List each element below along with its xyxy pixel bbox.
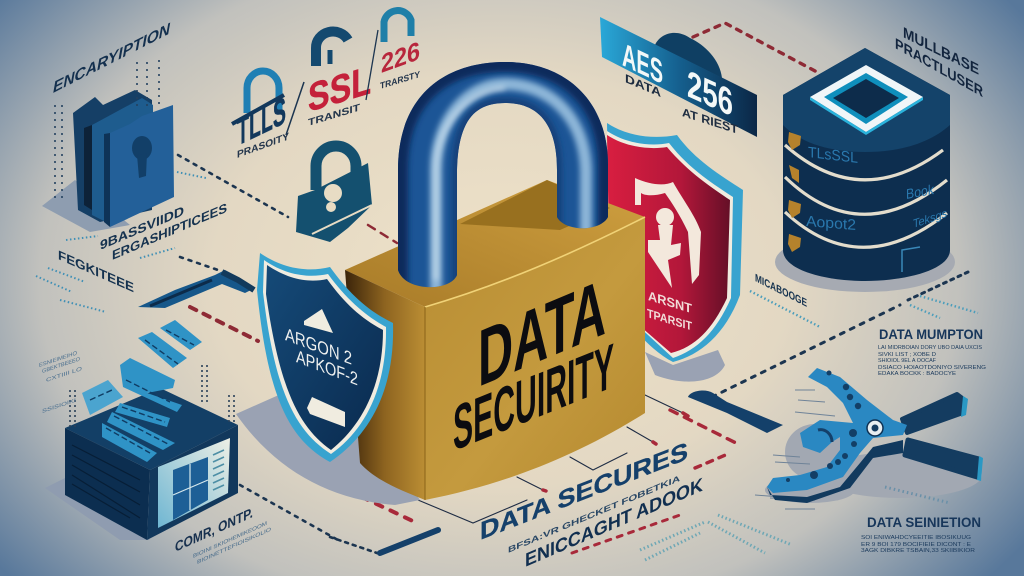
- icon: shield top glyph: [304, 309, 333, 333]
- small gibberish labels left: [39, 350, 83, 415]
- title block: data secures: DATA SECURES: [480, 438, 688, 546]
- icon: TLS padlock: TLLS: [237, 88, 286, 155]
- shield: red transit: TPARSIT: [647, 306, 692, 334]
- icon: encryption folders: [42, 60, 174, 232]
- large shadow under blue shield: [236, 390, 420, 505]
- text block: data seinetion: SOI ENIWAHDCYEEITIE IBOSIKUUG: [861, 535, 971, 541]
- label: encryption: ENCARYIPTION: [53, 20, 171, 97]
- database top screen: [810, 65, 923, 135]
- padlock title: [453, 260, 614, 464]
- banner: AES 256: DATA: [625, 71, 661, 100]
- database labels: Teksgs: [913, 206, 947, 231]
- icon: TLS padlock: [232, 71, 289, 161]
- text block: data seinetion: 3AGK DIBKRE TSBAIN,33 SKIIBIKIOR: [861, 548, 975, 554]
- icon: key tool: [138, 270, 255, 308]
- small gibberish labels left: SSISIOIKI: [42, 398, 77, 415]
- small gibberish labels left: GBEKTBEEEO: [42, 356, 81, 375]
- icon: key lock badge: [296, 146, 372, 242]
- icon: TLS padlock: PRASOITY: [237, 131, 289, 161]
- padlock: [345, 62, 645, 500]
- padlock body: [345, 180, 645, 500]
- shield: Argon2: APKOF-2: [296, 346, 358, 389]
- lower arm dark underside: [767, 440, 903, 503]
- icon: shield bottom glyph: [307, 397, 345, 427]
- text block: data mumption: EDAKA BOCKK : BADOCYE: [878, 371, 956, 377]
- label: password practices: FEGKITEEE: [58, 248, 134, 295]
- text block: data mumption: DATA MUMPTON: [879, 327, 983, 342]
- banner: AES 256: [600, 17, 757, 137]
- database labels: Aopot2: [806, 213, 856, 234]
- label: password practices: ERGASHIPTICEES: [112, 200, 227, 263]
- text block: data mumption: LAI MIDRBOIAN DORY UBO DAIA UXCIS: [878, 345, 982, 351]
- icon: blue scissors tool: [755, 368, 983, 509]
- text block: data seinetion: ER 9 BOI 179 BOCIFIEIE DICONT : E: [861, 542, 971, 548]
- shield text: ARGON 2: [285, 324, 352, 369]
- label: comp ontr: BIOINI SKIOHEMIKEOOM: [193, 521, 267, 560]
- blue jaws: [767, 368, 907, 493]
- icon: SSL padlock: SSL: [308, 57, 371, 121]
- title block: data secures: [480, 438, 704, 572]
- text block: data mumption: [878, 327, 986, 377]
- label: password practices: [58, 200, 227, 295]
- data sheets: [82, 320, 202, 462]
- banner: AES 256: AES: [622, 37, 663, 92]
- shield: red transit: [607, 123, 743, 362]
- label: comp ontr: BIOINETTEFIOISIKOLIO: [197, 527, 272, 566]
- database labels: [806, 144, 947, 234]
- banner: AES 256: 256: [687, 63, 733, 125]
- dashed connector lines: [178, 23, 968, 553]
- label: microbooge: MICABOOGE: [755, 272, 807, 310]
- icon: shield emblem: [635, 178, 701, 288]
- title block: data secures: ENICCAGHT ADOOK: [525, 474, 704, 572]
- icon: SSL padlock: TRANSIT: [308, 102, 361, 129]
- label: comp ontr: COMR, ONTP.: [175, 505, 253, 556]
- padlock shackle: [398, 62, 608, 295]
- text block: data mumption: DSIACO HOIAOTDONIYO SIVERENG: [878, 365, 986, 371]
- handles: [902, 394, 965, 433]
- padlock title: DATA: [478, 260, 606, 404]
- label: multibase practiser: PRACTLUSER: [895, 35, 983, 101]
- text block: data seinetion: DATA SEINIETION: [867, 514, 981, 530]
- label: multibase practiser: [895, 25, 983, 101]
- database labels: Book: [906, 181, 935, 202]
- text block: data mumption: SIVKI LIST ; XOBE D: [878, 352, 936, 358]
- title block: data secures: BFSA:VR GHECKET FOBETKIA: [508, 473, 681, 555]
- icon: 226 padlock: TRARSTY: [380, 69, 420, 91]
- shield text: ARSNT: [648, 288, 692, 316]
- banner: AES 256: AT RIEST: [682, 105, 738, 137]
- database stack: [775, 48, 955, 292]
- icon: server box: [45, 320, 238, 540]
- small key handle: [688, 390, 783, 433]
- tool shadow: [765, 424, 982, 503]
- key bar below padlock: [380, 530, 438, 553]
- icon: SSL padlock: [308, 30, 378, 129]
- text block: data seinetion: [861, 514, 981, 554]
- label: password practices: 9BASSVIIDD: [100, 203, 184, 253]
- small gibberish labels left: ESNIEIMEIHO: [39, 350, 78, 369]
- shield: Argon2: [257, 253, 393, 462]
- text block: data mumption: SHIOIOL 9EL A OOCAF: [878, 358, 937, 364]
- label: multibase practiser: MULLBASE: [903, 25, 979, 79]
- icon: 226 padlock: [380, 11, 420, 91]
- shield shadow: [645, 350, 725, 382]
- database labels: TLsSSL: [808, 144, 858, 167]
- icon: 226 padlock: 226: [381, 36, 420, 79]
- padlock: SECUIRITY: [453, 330, 614, 464]
- small gibberish labels left: CXTIIII LO: [46, 366, 83, 384]
- decorative data stripes left: [36, 172, 206, 312]
- decorative stripes right: [750, 291, 978, 327]
- divider slash: [286, 82, 304, 135]
- decorative stripes lower right: [640, 515, 792, 560]
